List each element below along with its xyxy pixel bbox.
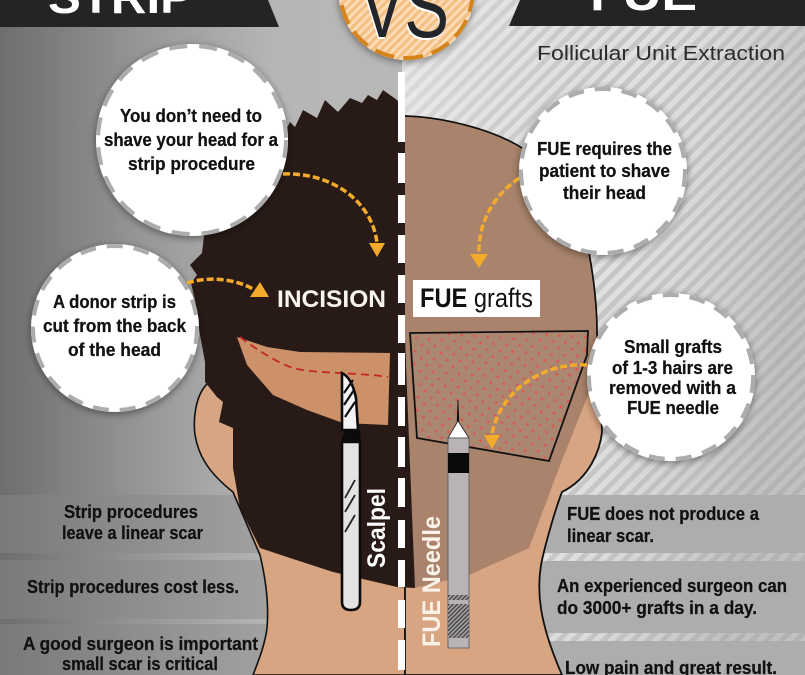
right fact rows — [530, 495, 805, 675]
centre dashed divider — [398, 72, 405, 670]
callout: no need to shave: shave your head for a — [104, 130, 279, 150]
callout: donor strip: of the head — [68, 340, 161, 360]
arrow: FUE shave to grafts — [470, 178, 519, 268]
callout: small grafts — [587, 293, 755, 461]
right facts text: do 3000+ grafts in a day. — [557, 598, 757, 618]
left facts text: A good surgeon is important — [23, 634, 258, 654]
right facts text: An experienced surgeon can — [557, 576, 787, 596]
left facts text — [23, 502, 258, 674]
right facts text — [557, 504, 787, 675]
callout: FUE requires shaving: FUE requires the — [537, 139, 672, 159]
left facts text: Strip procedures — [64, 502, 198, 522]
arrow: donor strip to incision — [187, 279, 269, 297]
callout: no need to shave: strip procedure — [128, 154, 255, 174]
left facts text: leave a linear scar — [62, 523, 203, 543]
handle — [342, 442, 360, 610]
red incision line — [240, 337, 388, 377]
left skin: ear and neck — [194, 380, 405, 675]
strip incision area — [237, 337, 390, 425]
left banner — [0, 0, 279, 27]
callout: no need to shave — [96, 44, 288, 236]
right facts text: FUE does not produce a — [567, 504, 760, 524]
left facts text: small scar is critical — [62, 654, 218, 674]
callout: donor strip — [31, 244, 199, 412]
right facts text: linear scar. — [567, 526, 654, 546]
FUE needle label: FUE Needle — [418, 516, 446, 647]
callout: small grafts: Small grafts — [624, 337, 722, 357]
subtitle: Follicular Unit Extraction — [537, 42, 785, 65]
callout: FUE requires shaving: their head — [563, 183, 646, 203]
head illustration — [190, 90, 602, 675]
callout: no need to shave: You don’t need to — [120, 106, 262, 126]
incision label: INCISION — [277, 286, 386, 313]
FUE needle — [448, 400, 469, 648]
callout: donor strip: A donor strip is — [53, 292, 176, 312]
callout: small grafts: FUE needle — [627, 398, 719, 418]
left facts text: Strip procedures cost less. — [27, 577, 239, 597]
callout: FUE requires shaving: patient to shave — [539, 161, 670, 181]
left hair — [190, 90, 415, 588]
callout: donor strip: cut from the back — [43, 316, 187, 336]
callout: FUE requires shaving — [519, 87, 687, 255]
left background — [0, 0, 402, 675]
blade — [342, 373, 358, 430]
scalpel — [340, 373, 361, 610]
right banner — [509, 0, 805, 26]
left fact rows — [0, 495, 300, 675]
graft area with red dots — [410, 331, 588, 461]
right head: shaved area — [405, 117, 596, 588]
callout: small grafts: of 1-3 hairs are — [612, 358, 733, 378]
right striped background — [402, 0, 805, 675]
arrow: shave callout to head — [283, 174, 385, 257]
FUE grafts label: FUE grafts — [420, 283, 533, 313]
callout: small grafts: removed with a — [609, 378, 737, 398]
scalpel label: Scalpel — [363, 488, 391, 568]
arrow: small grafts to graft area — [484, 365, 587, 449]
right head: skin and outline — [405, 116, 602, 675]
